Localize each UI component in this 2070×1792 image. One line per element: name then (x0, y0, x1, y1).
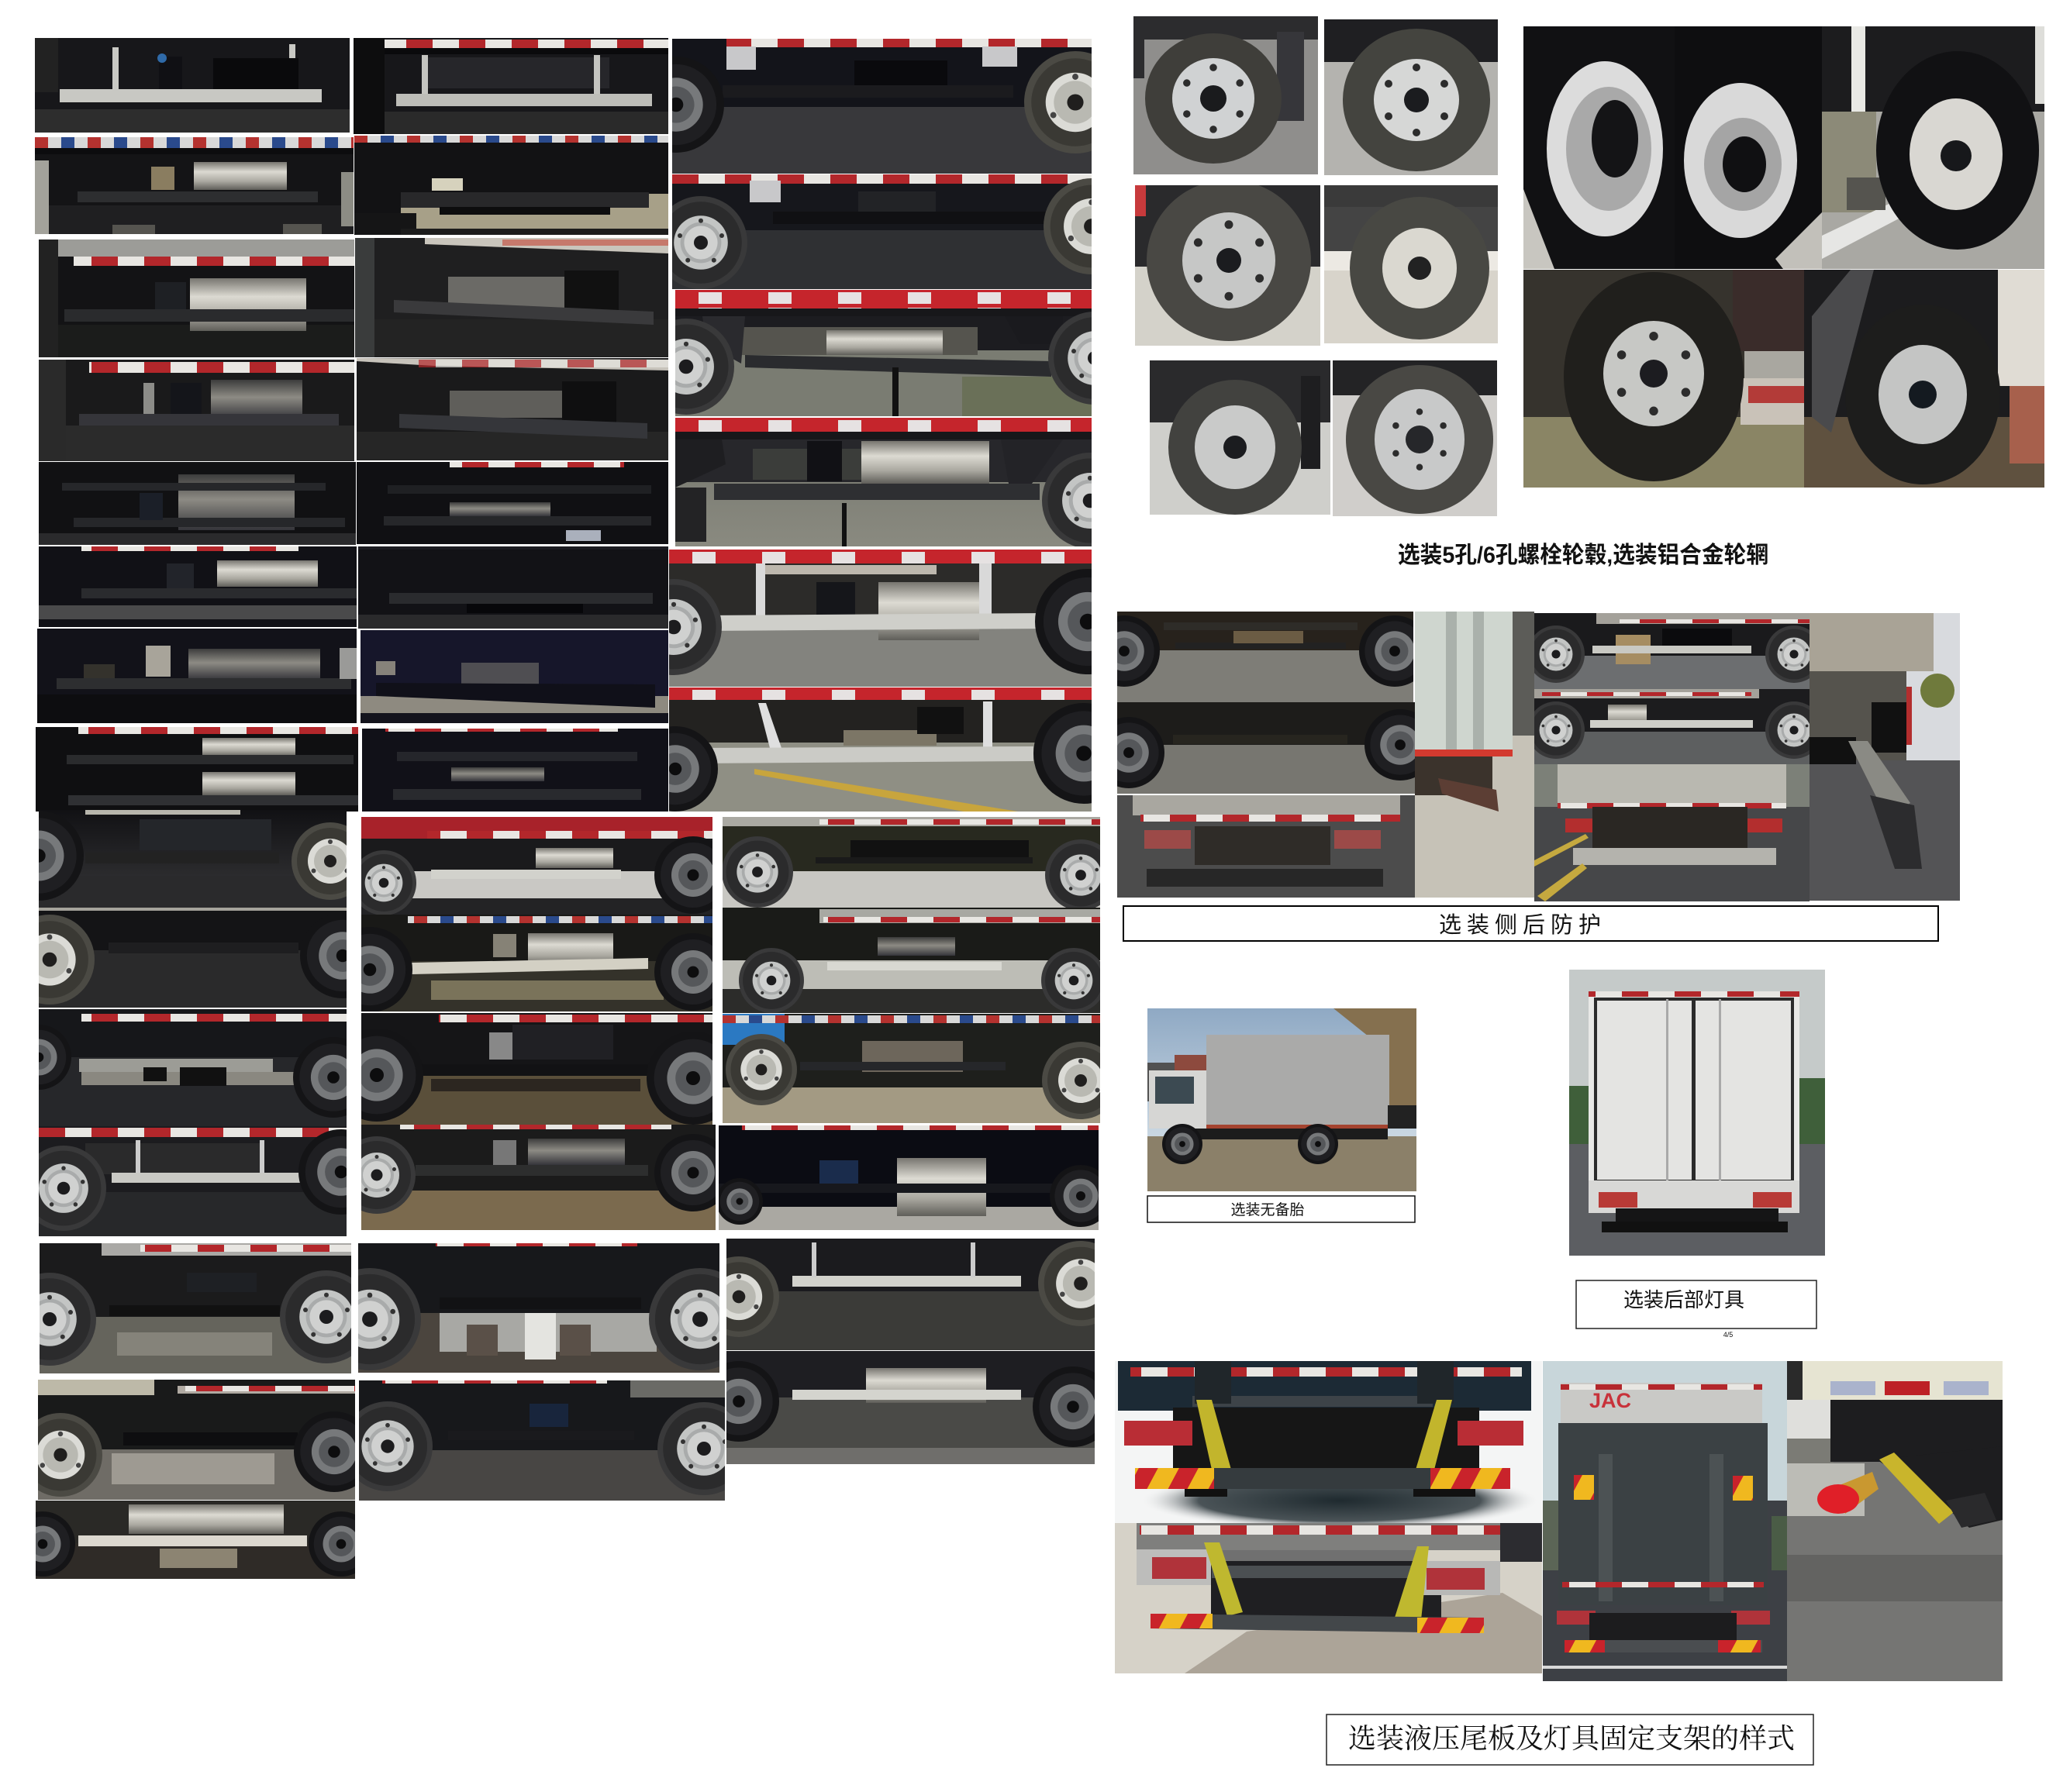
photo: D4 (39, 1126, 347, 1236)
panel: no spare tyre option (1147, 1008, 1416, 1222)
photo: D3 (39, 1009, 347, 1126)
panel: rear lamp option (1569, 970, 1825, 1339)
photo: blue strip with fuel tank, A2 (35, 137, 354, 234)
panel: larger side guard photos, third column (626, 39, 1141, 812)
photo: D2 (39, 908, 347, 1008)
photo: slanted strip dark rail, B4 (357, 358, 668, 460)
photo: Q1 (1527, 613, 1823, 689)
photo: muddy wheel Y2 (1804, 270, 2044, 488)
photo: wheel 1 (1133, 16, 1318, 174)
photo: E3 (361, 1013, 712, 1125)
photo: tail lift bracket close-up T4 (1787, 1361, 2003, 1681)
photo: white rail on yellow line ground, C6 (669, 688, 1092, 812)
photo: F2 (723, 908, 1100, 1013)
photo: F1 (723, 817, 1100, 908)
panel: side guard photos, middle-left block (0, 810, 1120, 1236)
photo: double rail with tank, A5 (39, 462, 356, 545)
photo: grey box strip with tank, A3 (39, 240, 354, 357)
photo: H1 (358, 1243, 719, 1373)
photo: I2 (726, 1351, 1095, 1464)
photo: blue frame with tank, A7 (37, 629, 357, 723)
caption: no spare tyre (1147, 1196, 1415, 1222)
photo: aluminium wheel X1 (1523, 26, 1675, 269)
photo: white strip black rail, C1 (672, 39, 1092, 174)
photo: double rail muffler, B8 (362, 729, 668, 812)
panel: wheel hub options (1133, 16, 2044, 568)
panel: side guard photos, lower-left block (3, 1239, 1123, 1579)
photo: box truck side view (1147, 1008, 1416, 1191)
photo: E1 (361, 817, 712, 915)
photo: white hub wheel X3 (1822, 26, 2044, 269)
photo: P3 (1117, 795, 1415, 898)
caption: rear lamp (1576, 1280, 1816, 1328)
photo: double rail with two tanks, A8 (36, 727, 358, 812)
photo: F4 (719, 1125, 1099, 1230)
photo: navy frame on bright patches, B7 (361, 630, 668, 723)
photo: dark frame rail, B6 (358, 546, 668, 629)
photo: G1 (40, 1243, 351, 1373)
photo: tail lift rear T1 (1115, 1361, 1542, 1530)
photo: G3 (36, 1501, 355, 1579)
photo: tail lift rear T2 (1115, 1523, 1542, 1673)
photo: H2 (343, 1380, 750, 1501)
caption: side and rear guard: 选装侧后防护 (1439, 912, 1606, 938)
photo: wheel 5 (1150, 360, 1330, 515)
caption: rear lamp: 选装后部灯具 (1623, 1288, 1744, 1311)
photo: white rail with silver tank, C5 (669, 550, 1092, 687)
caption: wheel options: 选装5孔/6孔螺栓轮毂,选装铝合金轮辋 (1398, 543, 1768, 568)
photo: double rail muffler, B5 (357, 462, 668, 544)
photo: dark rail on bright ground, B2 (354, 136, 668, 235)
photo: slanted strip dark rail, B3 (355, 238, 668, 357)
caption: hydraulic tail lift (1327, 1714, 1813, 1765)
panel: hydraulic tail lift options (1115, 1361, 2003, 1765)
photo: wheel 4 (1324, 185, 1498, 343)
panel: side guard chassis photos, top-left block (35, 38, 668, 812)
photo: rear view of box truck (1569, 970, 1825, 1256)
photo: D1 (39, 810, 347, 908)
photo: Q4 (1810, 613, 1960, 901)
photo: dark side rail with tank, A6 (39, 546, 357, 627)
photo: white side rail, left A1 (35, 38, 350, 133)
photo: muddy wheel Y1 (1523, 270, 1804, 488)
photo: I1 (726, 1239, 1095, 1350)
photo: white strip black rail, C2 (672, 174, 1092, 289)
photo: Q2 (1527, 689, 1823, 764)
photo: P1 (1088, 612, 1430, 702)
photo: P2 (1093, 702, 1436, 794)
photo: orange strip with tank, A4 (39, 360, 354, 461)
photo: E2 (361, 915, 712, 1011)
photo: wheel 6 (1333, 360, 1497, 516)
page number: 4/5 (1723, 1331, 1733, 1339)
photo: wheel 2 (1324, 19, 1498, 175)
photo: aluminium wheel X2 (1675, 26, 1822, 269)
photo: E4 (361, 1125, 716, 1230)
photo: P4 (1415, 612, 1534, 898)
photo: JAC truck with tail lift T3 (1543, 1361, 1787, 1681)
photo: red strip with fuel tank, C4 (675, 418, 1092, 546)
caption: hydraulic tail lift: 选装液压尾板及灯具固定支架的样式 (1348, 1723, 1795, 1754)
photo: JAC truck with tail lift T3: JAC (1589, 1389, 1631, 1412)
photo: F3 (723, 1014, 1100, 1123)
caption: no spare tyre: 选装无备胎 (1230, 1201, 1305, 1218)
photo: Q3 (1534, 764, 1810, 901)
panel: side and rear guard options (1088, 612, 1960, 941)
photo: white strip dark rail, B1 (354, 38, 668, 134)
photo: wheel 3 (1135, 180, 1320, 346)
photo: red strip with exhaust, C3 (675, 290, 1092, 416)
caption: side and rear guard (1123, 906, 1938, 941)
photo: G2 (38, 1380, 355, 1500)
